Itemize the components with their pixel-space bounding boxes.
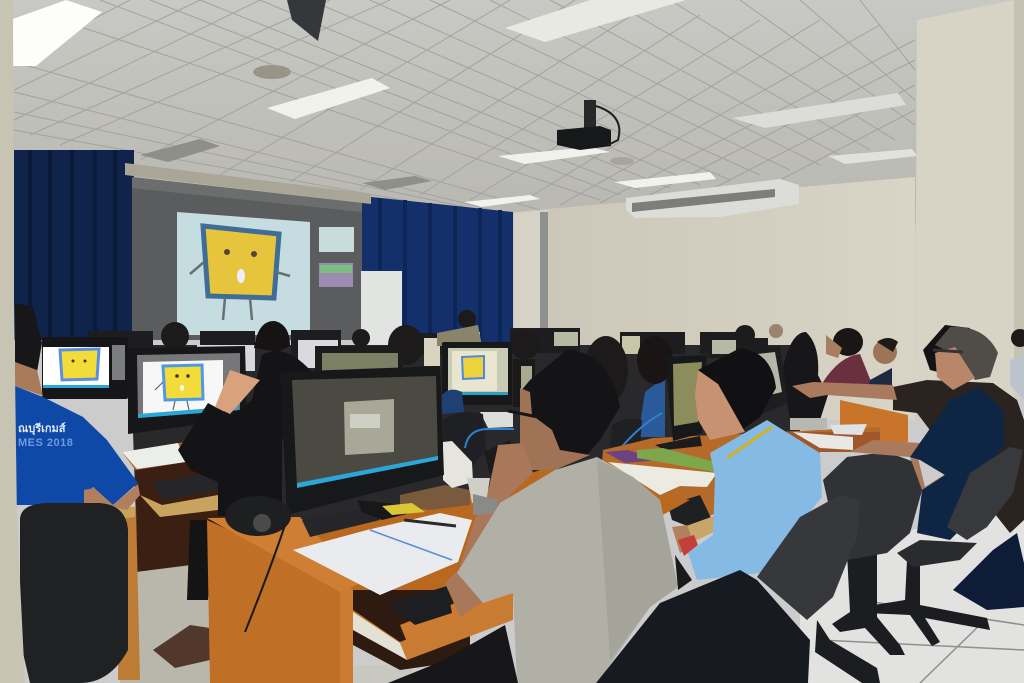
main keyboard: [388, 586, 452, 625]
torso: [457, 457, 678, 683]
navy shirt man: [850, 327, 1024, 610]
headphones on desk: [225, 496, 291, 632]
chair 3 back: [947, 447, 1023, 540]
papers right desk: [608, 418, 867, 495]
right pillar: [915, 0, 1014, 440]
camera mount: [287, 0, 326, 41]
chair 2 base: [832, 553, 905, 655]
small keyboard and tray, right: [668, 495, 714, 590]
brown bag, hat and cup: [400, 440, 514, 510]
back wall: [513, 177, 915, 420]
ceiling vents: [140, 65, 634, 190]
monitor stand and gear: [302, 500, 407, 537]
chair 1 base: [815, 620, 880, 683]
student at rear right: [868, 338, 898, 388]
whiteboard: [361, 271, 402, 346]
monitor: small back: [513, 359, 535, 407]
wall column seam: [514, 210, 548, 335]
blue polo student: [15, 303, 140, 510]
jacket on chair: [596, 570, 810, 683]
monitor: left near: [128, 346, 247, 434]
monitor: right-centre: [655, 355, 707, 450]
top edge: [207, 517, 361, 592]
pull-out tray: [353, 597, 513, 660]
ceiling lights: [10, 0, 917, 207]
glasses: [508, 411, 543, 418]
girl with long hair: [153, 321, 312, 668]
floor: [120, 500, 1024, 683]
main monitor: [280, 366, 444, 515]
chair 3 base: [867, 560, 990, 646]
left pillar: [0, 0, 25, 683]
right curtain: [362, 196, 513, 345]
lower body: [388, 625, 518, 683]
left desk block: [106, 438, 230, 680]
distant students: [161, 310, 783, 404]
projector: [557, 100, 619, 150]
front panel: [207, 520, 340, 683]
right desk surface: [600, 427, 880, 520]
striped-shirt student: [672, 348, 822, 580]
dark room mass behind the desks: [130, 345, 800, 520]
right instructor pointing: [792, 325, 1024, 533]
main foreground desk: [207, 465, 690, 683]
back rows of monitors: [88, 328, 768, 371]
ceiling: [0, 0, 1024, 225]
monitor: right far: [750, 346, 788, 414]
grey shirt student: [388, 350, 678, 683]
monitor: left far: [42, 337, 128, 399]
blue polo student: MES 2018: [18, 437, 73, 449]
back row papers and chairs: [442, 390, 662, 470]
student in dark shirt, rear: [782, 332, 828, 420]
watch: [473, 494, 498, 515]
projection screen: [125, 163, 371, 340]
chairs, foreground right: [757, 452, 990, 683]
monitor: centre: [442, 342, 512, 405]
low orange cabinet: [840, 400, 908, 442]
back surface strip: [290, 465, 690, 596]
student in maroon: [823, 328, 872, 386]
shirt lettering: ณบุรีเกมส์: [18, 422, 66, 436]
shadow under desk: [353, 590, 470, 670]
chair 3 seat: [897, 540, 977, 567]
papers on desk: [293, 503, 472, 595]
student at far-right edge: [1010, 329, 1024, 400]
chair 1 back: [757, 495, 860, 620]
face and neck: [520, 388, 590, 470]
monitor: mid dim: [315, 346, 403, 374]
office chair, left: [20, 503, 128, 683]
hand and forearm: [457, 443, 533, 580]
student in blue, centre: [637, 336, 673, 437]
air conditioner: [626, 179, 799, 218]
head: [520, 350, 620, 470]
chair 2 back: [823, 452, 923, 560]
projected drawing canvas: [177, 212, 310, 335]
left curtain: [14, 150, 134, 340]
